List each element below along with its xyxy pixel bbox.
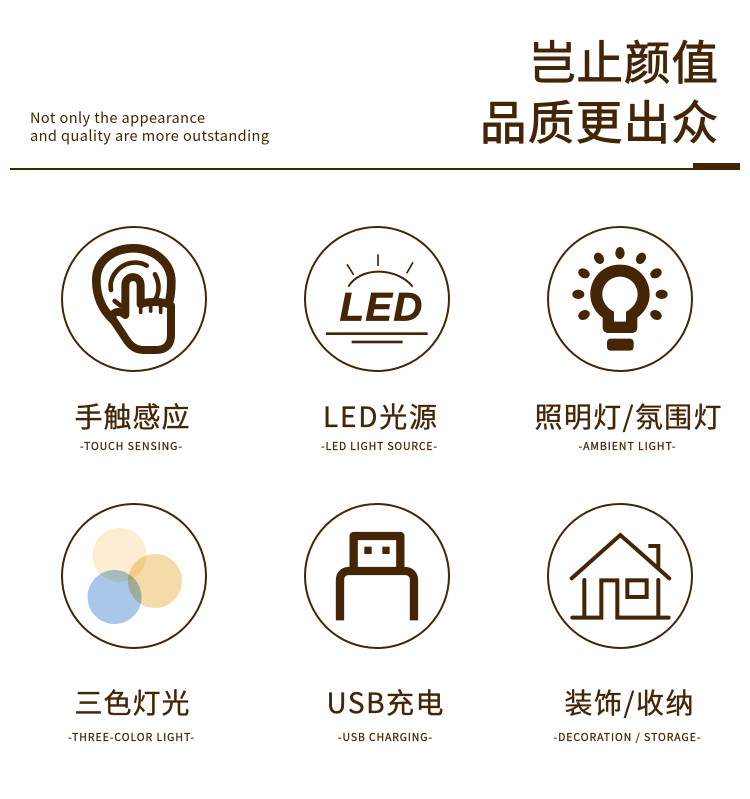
panel: three colour [62, 504, 206, 745]
english subtitle [30, 107, 269, 146]
panel: usb [305, 504, 449, 745]
sublabel: -THREE-COLOR LIGHT- [68, 730, 194, 745]
sublabel: -LED LIGHT SOURCE- [321, 439, 437, 454]
sublabel: -USB CHARGING- [338, 730, 432, 745]
panel: touch sensing [62, 227, 206, 454]
sublabel: -DECORATION / STORAGE- [554, 730, 701, 745]
label: 照明灯/氛围灯 [534, 396, 722, 436]
icon: touch hand [62, 227, 206, 371]
label: 三色灯光 [74, 682, 190, 722]
sublabel: -AMBIENT LIGHT- [578, 439, 676, 454]
title [480, 26, 718, 154]
panel: ambient [534, 227, 722, 454]
english subtitle: and quality are more outstanding [30, 125, 269, 146]
english subtitle: Not only the appearance [30, 107, 205, 128]
label: USB充电 [326, 682, 444, 722]
label: 手触感应 [74, 396, 190, 436]
label: LED光源 [323, 396, 437, 436]
icon: house [548, 504, 692, 648]
label: 装饰/收纳 [564, 682, 694, 722]
icon: light bulb [548, 227, 692, 371]
icon: LED [305, 227, 449, 371]
panel: decoration [548, 504, 701, 745]
icon: LED: LED [340, 285, 422, 329]
header rule [10, 163, 740, 170]
icon: three overlapping circles [62, 504, 206, 648]
title: 岂止颜值 [529, 26, 718, 94]
title: 品质更出众 [480, 86, 718, 154]
panel: led [305, 227, 449, 454]
icon: USB plug [305, 504, 449, 648]
sublabel: -TOUCH SENSING- [80, 439, 182, 454]
